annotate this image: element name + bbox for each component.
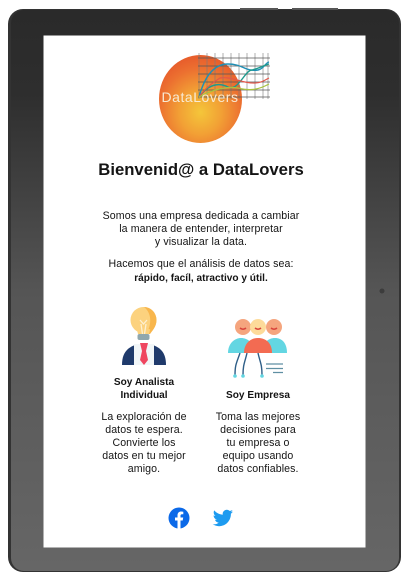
analyst text: La exploración de: [101, 411, 187, 423]
intro text: Somos una empresa dedicada a cambiar: [103, 210, 300, 222]
analyst text: datos te espera.: [105, 424, 183, 436]
logo circle: [159, 55, 242, 143]
icon: facebook: [168, 508, 190, 528]
value statement: rápido, facíl, atractivo y útil.: [134, 273, 268, 284]
logo wordmark: DataLovers: [161, 89, 239, 105]
icon: team: [228, 319, 287, 378]
logo: DataLovers: [159, 53, 270, 143]
logo chart: [198, 53, 270, 99]
icon: twitter: [213, 510, 233, 526]
company text: [216, 411, 300, 475]
heading: Soy Analista Individual: [114, 377, 174, 401]
value statement: Hacemos que el análisis de datos sea:: [108, 258, 294, 270]
analyst text: [101, 411, 187, 475]
icon: light bulb analyst: [122, 307, 166, 365]
company text: Toma las mejores: [216, 411, 300, 423]
screen: [44, 36, 366, 548]
company text: tu empresa o: [226, 437, 290, 449]
analyst text: Convierte los: [112, 437, 176, 449]
company text: decisiones para: [220, 424, 296, 436]
company text: datos confiables.: [217, 463, 299, 475]
title: Bienvenid@ a DataLovers: [98, 160, 304, 179]
company text: equipo usando: [223, 450, 293, 462]
heading: Soy Analista Individual: Individual: [120, 390, 168, 401]
heading: Soy Analista Individual: Soy Analista: [114, 377, 174, 388]
analyst text: datos en tu mejor: [102, 450, 186, 462]
analyst text: amigo.: [128, 463, 160, 475]
intro text: y visualizar la data.: [155, 236, 247, 248]
intro text: [103, 210, 300, 248]
heading: Soy Empresa: Soy Empresa: [226, 390, 290, 401]
intro text: la manera de entender, interpretar: [119, 223, 283, 235]
value statement: [108, 258, 294, 284]
